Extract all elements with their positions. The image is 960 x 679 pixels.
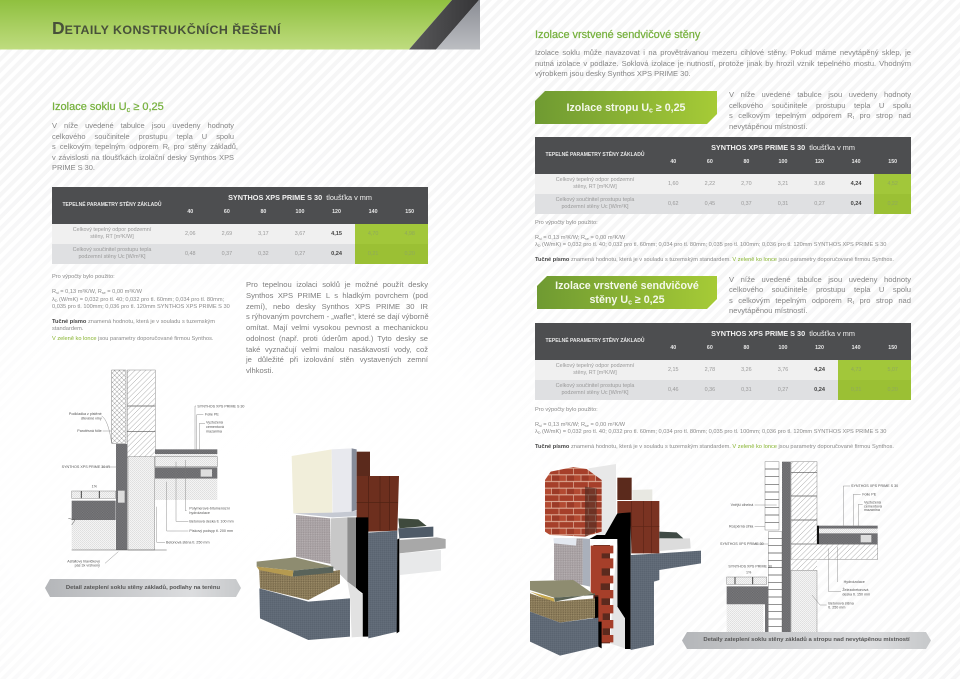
table: sokl: Celkový tepelný odpor podzemní: [73, 227, 151, 233]
table: sendvič: 0,31: [741, 387, 752, 393]
table: strop: 0,27: [814, 201, 825, 207]
table: strop: 150: [888, 159, 897, 165]
caption arrow: right detail: Detaily zateplení soklu stěny základů a stropu nad nevytápěnou místností: [703, 637, 910, 643]
drawing labels: Betonová stěna tl. 250 mm: [166, 540, 210, 544]
drawing labels: Folie PE: [205, 413, 219, 417]
table: sendvič: 100: [779, 345, 787, 351]
table: strop: stěny, RT [m²K/W]: [573, 184, 617, 190]
drawing labels: SYNTHOS XPS PRIME 30: [728, 564, 772, 568]
table: sendvič: 0,27: [778, 387, 788, 393]
text: izolace soklu: v závislosti na tloušťkách izolační desky Synthos XPS: [52, 153, 234, 162]
drawing labels: Pískový podsyp tl. 200 mm: [189, 529, 233, 533]
banner: izolace stropu: Izolace stropu Uc ≥ 0,25: [566, 102, 686, 114]
table: sendvič: Celkový tepelný odpor podzemní: [556, 363, 634, 369]
drawing labels: tl. 250 mm: [828, 606, 845, 610]
drawing labels: Betonová stěna: [828, 602, 855, 606]
table: strop: 80: [743, 159, 749, 165]
text: soklové desky: vlhkosti.: [246, 366, 273, 375]
table: sokl: 140: [369, 209, 378, 215]
notes: strop: Tučné písmo znamená hodnotu, která je v souladu s tuzemským standardem. V zeleně ko lonce jsou parametry doporučované firmou Synthos.: [535, 257, 894, 263]
table: sendvič: 2,78: [705, 367, 715, 373]
text: sendvičová stěna: Izolace soklu může navazovat i na provětrávanou mezeru cihlové stěny. Pokud máme nevytápěný sklep, je: [535, 48, 911, 57]
table: strop: 4,52: [887, 180, 898, 186]
notes: sendvič: Pro výpočty bylo použito:: [535, 407, 598, 413]
table: strop: 4,24: [851, 180, 862, 186]
drawing labels: SYNTHOS XPS PRIME S 30: [197, 405, 244, 409]
banner: sendvičová stěna: stěny Uc ≥ 0,25: [589, 294, 665, 306]
table: sokl: 40: [187, 209, 193, 215]
table: sendvič: 2,15: [668, 367, 679, 373]
drawing labels: Vyztužená: [864, 501, 882, 505]
drawing labels: Parotěsná fólie: [77, 429, 102, 433]
table: sokl: 0,32: [258, 251, 269, 257]
grey diagonal strip: [436, 0, 480, 50]
drawing labels: mazanina: [864, 508, 881, 512]
table: strop: 100: [779, 159, 787, 165]
drawing labels: Polymerové-bitumenózní: [189, 507, 230, 511]
table: strop: 0,45: [705, 201, 715, 207]
table: sendvič: 3,26: [741, 367, 752, 373]
text: soklové desky: [246, 280, 429, 375]
text: izolace soklu: [52, 121, 238, 172]
notes: strop: Rsi = 0,13 m²K/W; Rse = 0,00 m²K/W: [535, 235, 625, 241]
table: sendvič: Celkový součinitel prostupu tepla: [556, 383, 634, 389]
table: sendvič: stěny, RT [m²K/W]: [573, 370, 617, 376]
drawing labels: Betonová deska tl. 100 mm: [189, 519, 234, 523]
banner: sendvičová stěna: Izolace vrstvené sendvičové: [555, 280, 699, 292]
text: sendvič: V níže uvedené tabulce jsou uvedeny hodnoty: [729, 274, 911, 284]
text: soklové desky: s rýhovaným povrchem - „wafle“, které se dají výborně: [246, 312, 429, 321]
drawing labels: pás 3x vrstvený: [75, 564, 100, 568]
page title: DETAILY KONSTRUKČNÍCH ŘEŠENÍ: [52, 18, 281, 38]
text: soklové desky: odolnost (např. proti úderům apod.) Tyto desky se: [246, 334, 428, 343]
table: sokl: 150: [405, 209, 414, 215]
table: sokl: TEPELNÉ PARAMETRY STĚNY ZÁKLADŮ: [62, 202, 162, 208]
text: soklové desky: Synthos XPS PRIME L s hladkým povrchem (pod: [246, 291, 428, 300]
text: sendvič: nevytápěnou místností.: [729, 306, 808, 315]
drawing labels: Rozpěrná cihla: [729, 524, 754, 528]
table: sokl: 4,15: [331, 230, 342, 236]
table: sokl: SYNTHOS XPS PRIME S 30 tloušťka v mm: [228, 192, 372, 202]
drawing labels: 1%: [92, 485, 98, 489]
text: soklové desky: omítat. Mají velmi vysokou pevnost a mechanickou: [246, 323, 428, 332]
notes: sokl: Rsi = 0,13 m²K/W, Rse = 0,00 m²K/W: [52, 289, 142, 295]
header banner: [0, 0, 480, 50]
table: sokl: stěny, RT [m²K/W]: [90, 234, 134, 240]
notes: sendvič: λD (W/mK) = 0,032 pro tl. 40; 0,032 pro tl. 60mm; 0,034 pro tl. 80mm; 0,035 pro tl. 100mm; 0,036 pro tl. 120mm SYNTHOS XPS PRIME S 30: [535, 429, 886, 435]
notes: sokl: V zeleně ko lonce jsou parametry doporučované firmou Synthos.: [52, 336, 213, 342]
text: soklové desky: zemí), nebo desky Synthos XPS PRIME 30 IR: [246, 302, 428, 310]
table: sendvič: 4,73: [851, 367, 861, 373]
3D illustration: sendvič: [530, 464, 701, 656]
table: sokl: 80: [260, 209, 266, 215]
drawing: technical detail sendvič: [720, 462, 898, 632]
text: sendvičová stěna: výrobkem jsou desky Synthos XPS PRIME 30.: [535, 69, 691, 78]
table: sendvič: SYNTHOS XPS PRIME S 30 tloušťka v mm: [711, 328, 855, 338]
table: sokl: podzemní stěny Uc [W/m²K]: [78, 254, 146, 260]
table: sendvič: 40: [670, 345, 676, 351]
table: strop: Celkový součinitel prostupu tepla: [556, 197, 634, 203]
table: sokl: 100: [296, 209, 304, 215]
notes: sokl: λD (W/mK) = 0,032 pro tl. 40; 0,032 pro tl. 60mm; 0,034 pro tl. 80mm;: [52, 297, 224, 303]
notes: sokl: [52, 274, 230, 342]
drawing labels: [62, 405, 244, 568]
table: sendvič: 0,36: [705, 387, 715, 393]
text: sendvič: celkového součinitele prostupu tepla U spolu: [729, 285, 911, 294]
notes: sokl: 0,035 pro tl. 100mm; 0,036 pro tl. 120mm SYNTHOS XPS PRIME S 30: [52, 304, 230, 310]
table: strop: SYNTHOS XPS PRIME S 30 tloušťka v mm: [711, 142, 855, 152]
table: sendvič: 0,24: [814, 387, 825, 393]
notes: sokl: standardem.: [52, 326, 83, 332]
caption arrow: left detail: [45, 579, 241, 597]
notes: sokl: Pro výpočty bylo použito:: [52, 274, 115, 280]
heading: izolace soklu: Izolace soklu Uc ≥ 0,25: [52, 101, 164, 114]
table: sokl: 2,69: [222, 230, 232, 236]
caption arrow: right detail: [682, 632, 931, 649]
table: sokl: [52, 187, 428, 264]
drawing labels: Hydroizolace: [844, 580, 865, 584]
banner: izolace stropu: [535, 91, 717, 124]
caption arrow: left detail: Detail zateplení soklu stěny základů, podlahy na terénu: [66, 585, 220, 591]
table: sokl: 0,20: [404, 251, 415, 257]
drawing labels: SYNTHOS XPS PRIME S 30: [851, 484, 898, 488]
table: strop: 0,31: [778, 201, 788, 207]
table: strop: podzemní stěny Uc [W/m²K]: [561, 204, 629, 210]
table: sendvič: 4,24: [814, 367, 825, 373]
heading: sendvičová stěna: Izolace vrstvené sendvičové stěny: [535, 29, 700, 41]
table: sokl: 3,17: [258, 230, 269, 236]
table: strop: Celkový tepelný odpor podzemní: [556, 177, 634, 183]
table: strop: 3,68: [814, 180, 825, 186]
drawing labels: deska tl. 150 mm: [842, 593, 870, 597]
table: strop: 3,21: [778, 180, 788, 186]
table: sokl: Celkový součinitel prostupu tepla: [73, 247, 151, 253]
text: strop: celkového součinitele prostupu tepla U spolu: [729, 101, 911, 110]
table: sendvič: 80: [743, 345, 749, 351]
drawing labels: Železobetonová: [842, 587, 869, 592]
leader lines: [755, 486, 863, 605]
drawing labels: [720, 484, 898, 610]
table: sokl: 120: [332, 209, 341, 215]
table: sendvič: 5,07: [887, 367, 898, 373]
table: strop: 0,22: [887, 201, 898, 207]
notes: sendvič: Rsi = 0,13 m²K/W; Rse = 0,00 m²K/W: [535, 422, 625, 428]
notes: strop: [535, 220, 894, 263]
notes: sokl: Tučné písmo znamená hodnotu, která je v souladu s tuzemským: [52, 319, 215, 325]
drawing labels: dřevěné vlny: [81, 416, 102, 420]
drawing labels: SYNTHOS XPS PRIME 30: [720, 542, 764, 546]
table: strop: 0,37: [741, 201, 752, 207]
table: strop: 140: [852, 159, 861, 165]
table: sokl: 60: [224, 209, 230, 215]
table: sokl: 4,70: [368, 230, 378, 236]
text: izolace soklu: V níže uvedené tabulce jsou uvedeny hodnoty: [52, 121, 234, 130]
table: strop: 0,24: [851, 201, 862, 207]
table: sendvič: 120: [815, 345, 824, 351]
text: strop: V níže uvedené tabulce jsou uvedeny hodnoty: [729, 90, 911, 99]
table: sokl: 0,37: [222, 251, 232, 257]
table: strop: 2,22: [705, 180, 715, 186]
table: sendvič: 150: [888, 345, 897, 351]
table: sokl: 3,67: [295, 230, 305, 236]
drawing labels: Vnější cihelná: [731, 503, 754, 507]
banner: sendvičová stěna: [537, 276, 717, 309]
text: sendvičová stěna: nutná izolace v podlaze. Soklová izolace je nutností, protože jinak by hrozil vznik tepelného mostu. Vhodným: [535, 59, 911, 68]
table: sendvič: 3,76: [778, 367, 788, 373]
notes: sendvič: [535, 407, 894, 450]
text: sendvič: s celkovým tepelným odporem Rt pro strop nad: [729, 296, 911, 306]
text: soklové desky: Pro tepelnou izolaci soklů je možné použít desky: [246, 280, 428, 289]
text: soklové desky: je důležité při izolování stěn vystavených zemní: [246, 355, 428, 364]
table: sokl: 0,24: [331, 251, 342, 257]
table: strop: 1,60: [668, 180, 679, 186]
table: strop: 60: [707, 159, 713, 165]
dark diagonal strip: [409, 0, 479, 50]
table: strop: TEPELNÉ PARAMETRY STĚNY ZÁKLADŮ: [546, 152, 644, 158]
table: sokl: 0,21: [368, 251, 378, 257]
drawing labels: hydroizolace: [189, 511, 210, 515]
drawing labels: Vyztužená: [206, 421, 224, 425]
3D illustration: sokl: [256, 448, 446, 640]
text: sendvičová stěna: [535, 48, 911, 78]
drawing labels: 1%: [746, 571, 752, 575]
table: sokl: 2,06: [185, 230, 196, 236]
table: sokl: 0,27: [295, 251, 305, 257]
table: strop: 120: [815, 159, 824, 165]
drawing labels: SYNTHOS XPS PRIME 30 IR: [62, 465, 110, 469]
text: strop: nevytápěnou místností.: [729, 122, 808, 131]
text: soklové desky: také vyznačují velmi malou nasákavostí vody, což: [246, 344, 428, 354]
table: sendvič: 140: [852, 345, 861, 351]
text: sendvič: [729, 274, 911, 315]
table: sokl: 0,48: [185, 251, 196, 257]
table: strop: 40: [670, 159, 676, 165]
table: sokl: 4,98: [404, 230, 415, 236]
text: izolace soklu: PRIME S 30.: [52, 163, 95, 172]
text: izolace soklu: celkového součinitele prostupu tepla U spolu: [52, 132, 234, 141]
table: strop: 0,62: [668, 201, 679, 207]
table: sendvič: TEPELNÉ PARAMETRY STĚNY ZÁKLADŮ: [546, 338, 644, 344]
table: sendvič: 0,21: [851, 387, 861, 393]
table: strop: [535, 137, 911, 214]
leader lines: [102, 406, 205, 563]
drawing labels: cementová: [206, 425, 225, 429]
drawing labels: Folie PE: [862, 492, 877, 496]
notes: strop: Pro výpočty bylo použito:: [535, 220, 598, 226]
table: sendvič: podzemní stěny Uc [W/m²K]: [561, 390, 629, 396]
text: izolace soklu: s celkovým tepelným odporem Rt pro stěny základů,: [52, 142, 238, 152]
drawing labels: Asfaltový hlavičkový: [67, 559, 100, 563]
text: strop: [729, 90, 911, 131]
text: strop: s celkovým tepelným odporem Rt pro strop nad: [729, 111, 911, 121]
drawing: technical detail sokl: [62, 370, 244, 568]
table: sendvič: 60: [707, 345, 713, 351]
notes: strop: λD (W/mK) = 0,032 pro tl. 40; 0,032 pro tl. 60mm; 0,034 pro tl. 80mm; 0,035 pro tl. 100mm; 0,036 pro tl. 120mm SYNTHOS XPS PRIME S 30: [535, 242, 886, 248]
table: sendvič: 0,46: [668, 387, 679, 393]
drawing labels: Podkladka z plstěné: [69, 412, 102, 416]
notes: sendvič: Tučné písmo znamená hodnotu, která je v souladu s tuzemským standardem. V zeleně ko lonce jsou parametry doporučované firmou Synthos.: [535, 444, 894, 450]
drawing labels: cementová: [864, 504, 883, 508]
table: strop: 2,70: [741, 180, 752, 186]
table: sendvič: [535, 323, 911, 400]
table: sendvič: 0,20: [887, 387, 898, 393]
drawing labels: mazanina: [206, 429, 223, 433]
